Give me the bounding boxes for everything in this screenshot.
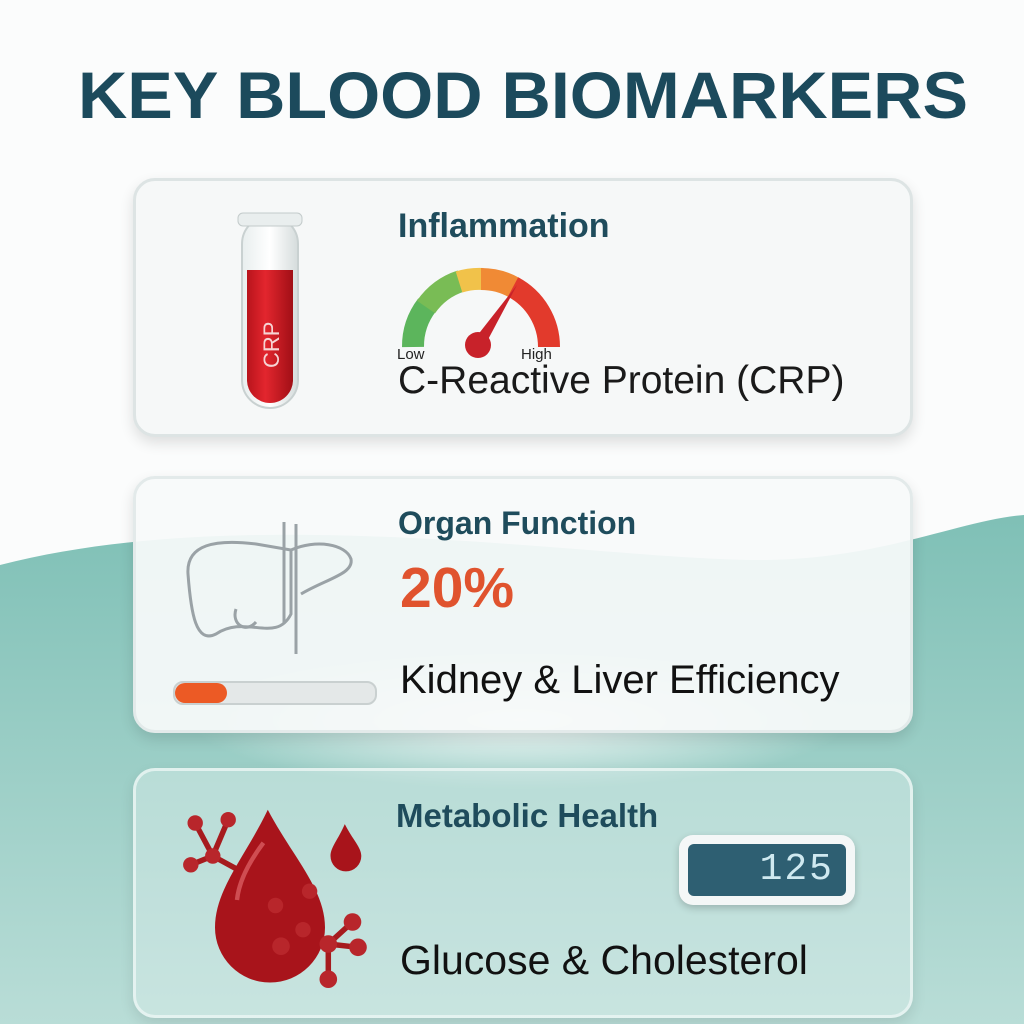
heading: Organ Function: Organ Function xyxy=(398,505,636,541)
chart: gauge: Low xyxy=(397,346,425,363)
chart: gauge: High xyxy=(521,346,552,363)
progress bar xyxy=(173,681,377,705)
display: 125 xyxy=(679,835,855,905)
icon: CRP test tube: CRP xyxy=(259,322,284,368)
heading: Inflammation: Inflammation xyxy=(398,207,610,245)
icon: CRP test tube xyxy=(238,212,302,409)
panel: inflammation xyxy=(133,178,913,437)
text: glucose: Glucose & Cholesterol xyxy=(400,937,808,983)
chart: gauge xyxy=(397,268,560,363)
text: CRP: C-Reactive Protein (CRP) xyxy=(398,359,844,402)
icon: blood drop with molecules xyxy=(183,810,367,988)
panel: organ function xyxy=(133,476,913,733)
title: KEY BLOOD BIOMARKERS xyxy=(78,58,968,132)
panel: metabolic health xyxy=(133,768,913,1018)
heading: Metabolic Health: Metabolic Health xyxy=(396,797,658,834)
text: kidney & liver: Kidney & Liver Efficiency xyxy=(400,658,839,702)
display: 125: 125 xyxy=(760,848,834,891)
icon: liver/kidney outline xyxy=(186,522,353,654)
text: 20%: 20% xyxy=(400,556,514,620)
